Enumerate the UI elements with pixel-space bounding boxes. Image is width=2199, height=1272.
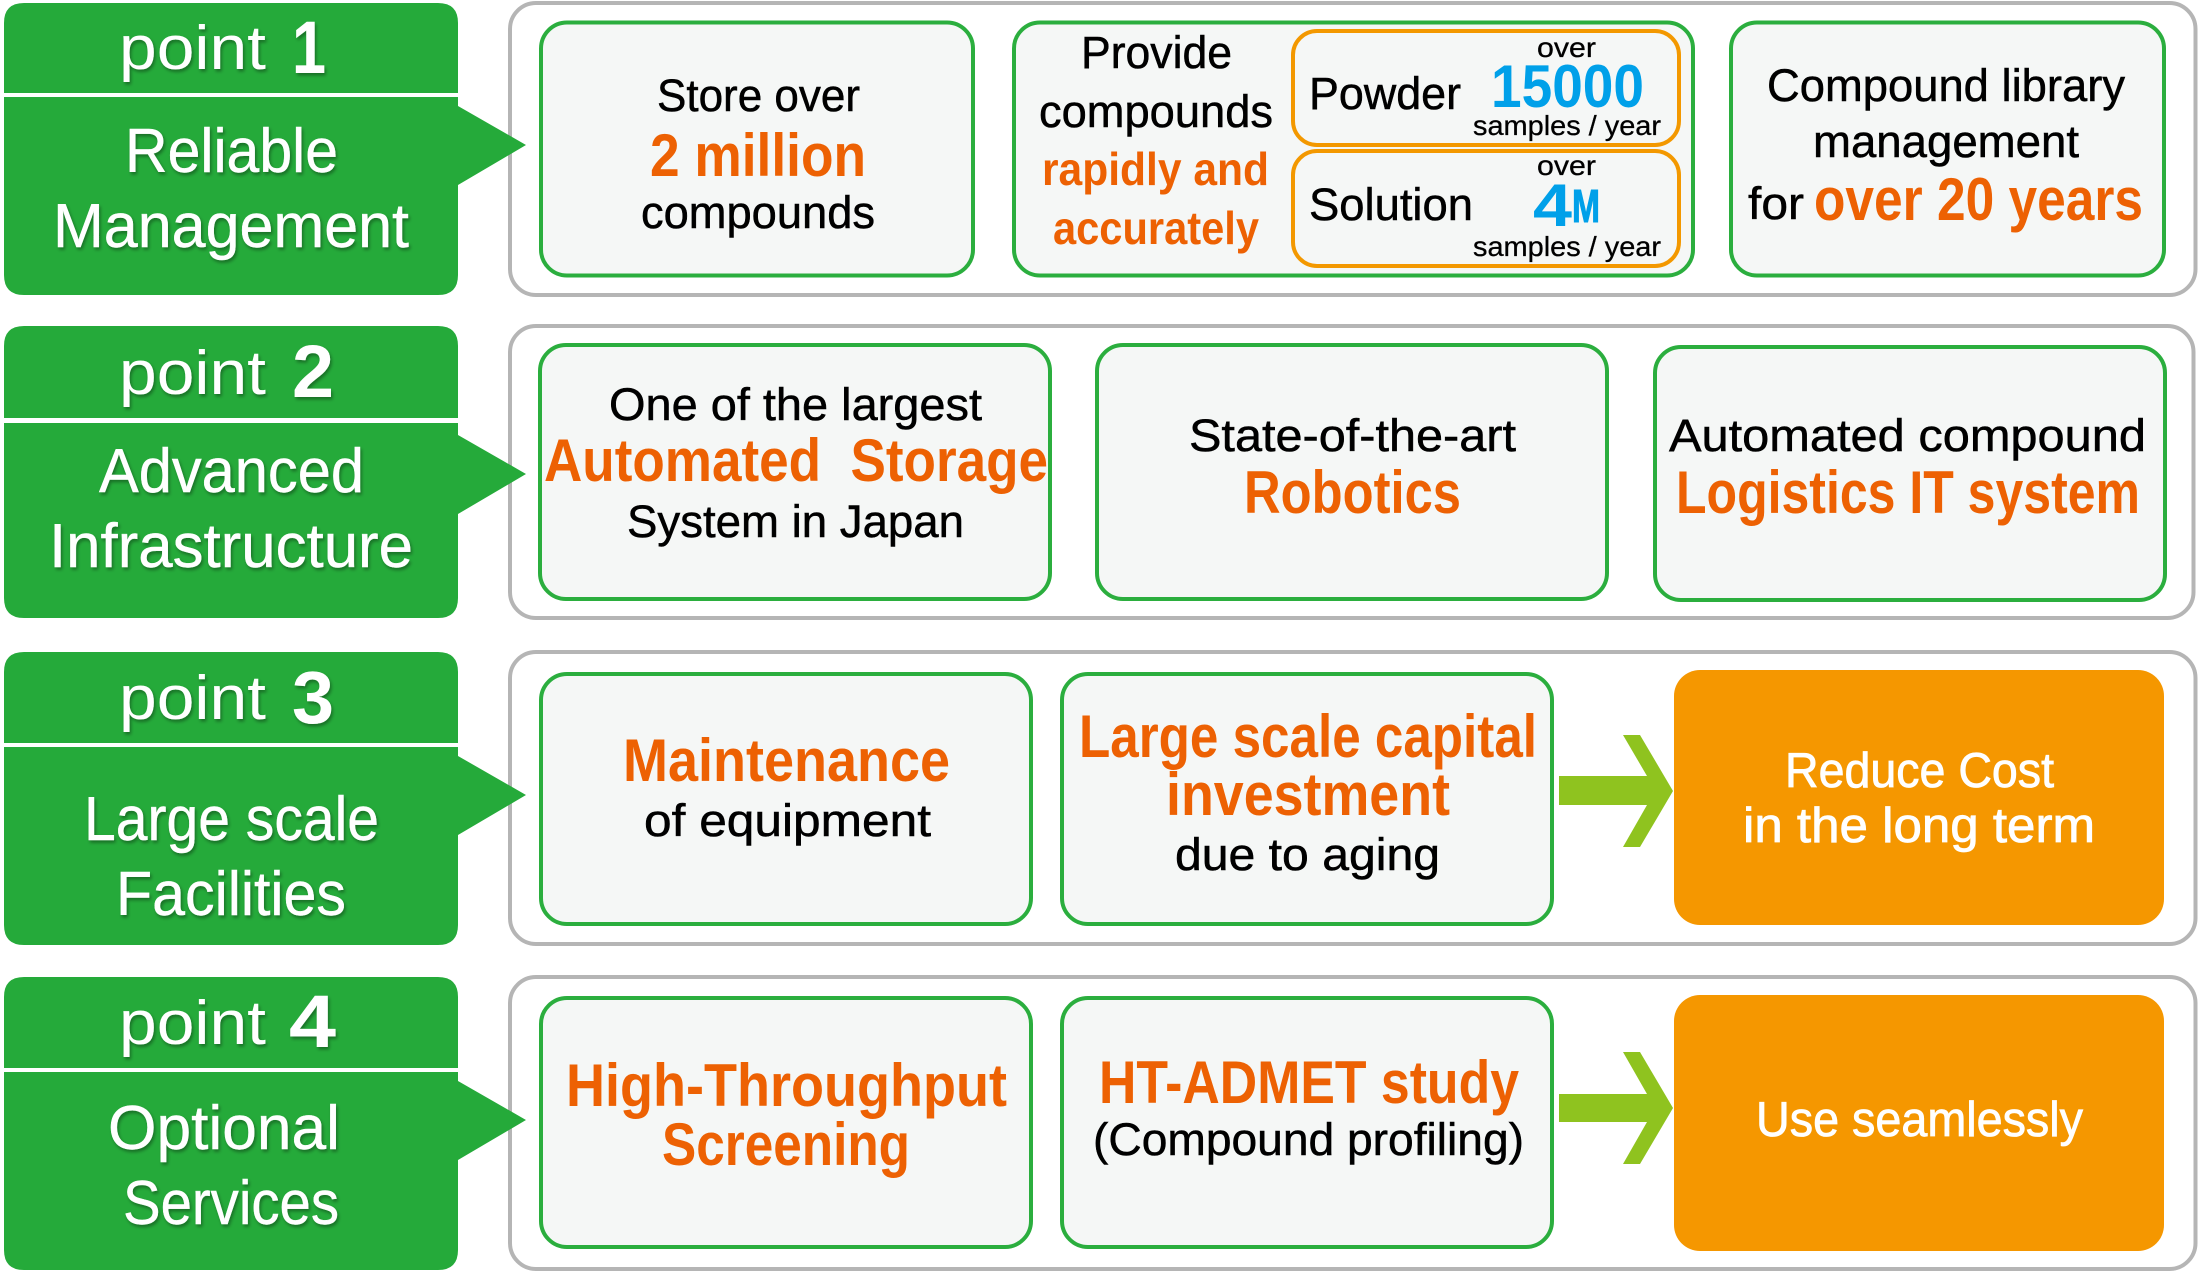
row 3: large scale facilities bbox=[4, 652, 2196, 945]
heading: point 2: point bbox=[119, 339, 266, 408]
tab header shape bbox=[4, 326, 458, 418]
result: reduce cost bbox=[1674, 670, 2164, 925]
result: use seamlessly: Use seamlessly bbox=[1756, 1093, 2083, 1147]
card: maintenance bbox=[541, 674, 1031, 924]
sub-card: powder: Powder bbox=[1309, 68, 1461, 119]
tab: point 4 bbox=[4, 977, 526, 1270]
card: library management bbox=[1731, 22, 2164, 276]
card: logistics IT system bbox=[1655, 347, 2165, 600]
card: HT-ADMET study: (Compound profiling) bbox=[1093, 1114, 1524, 1165]
heading: Reliable Management: Management bbox=[53, 192, 409, 261]
sub-card: powder: samples / year bbox=[1473, 110, 1661, 141]
card: capital investment bbox=[1062, 674, 1552, 924]
panel: point 4 content bbox=[510, 977, 2196, 1269]
heading: Advanced Infrastructure: Infrastructure bbox=[49, 512, 413, 581]
heading: Optional Services bbox=[108, 1094, 340, 1238]
heading: point 4 bbox=[119, 980, 336, 1063]
card: robotics: State-of-the-art bbox=[1189, 410, 1517, 461]
result: reduce cost: in the long term bbox=[1743, 799, 2095, 853]
arrow: to reduce cost bbox=[1559, 735, 1673, 847]
card: maintenance: of equipment bbox=[644, 795, 932, 846]
card: library management: Compound library bbox=[1767, 60, 2125, 111]
panel: point 1 content bbox=[510, 3, 2196, 295]
tab body with pointer bbox=[4, 747, 526, 945]
card: automated storage: Automated Storage bbox=[544, 427, 1048, 494]
heading: Reliable Management bbox=[53, 117, 409, 261]
heading: point 3: 3 bbox=[292, 656, 334, 739]
sub-card: powder: 15000 bbox=[1491, 53, 1644, 120]
heading: point 3: point bbox=[119, 664, 266, 733]
card: automated storage: One of the largest bbox=[609, 379, 983, 430]
card: provide compounds: compounds bbox=[1039, 86, 1273, 137]
card: library management: management bbox=[1813, 116, 2079, 167]
tab: point 2 bbox=[4, 326, 526, 618]
card: automated storage: System in Japan bbox=[627, 496, 964, 547]
sub-card: solution bbox=[1293, 150, 1679, 266]
card: library management: for bbox=[1748, 178, 1804, 229]
heading: point 1: 1 bbox=[292, 6, 326, 89]
tab: point 1 bbox=[4, 3, 526, 295]
heading: Reliable Management: Reliable bbox=[125, 117, 338, 186]
heading: Optional Services: Services bbox=[123, 1169, 339, 1238]
card: provide compounds: Provide bbox=[1081, 27, 1232, 78]
card: capital investment: due to aging bbox=[1175, 829, 1440, 880]
card: robotics: Robotics bbox=[1244, 459, 1461, 526]
sub-card: powder: over bbox=[1537, 32, 1596, 63]
sub-card: solution: over bbox=[1537, 150, 1596, 181]
card: robotics bbox=[1097, 345, 1607, 599]
sub-card: powder bbox=[1293, 31, 1679, 145]
result: reduce cost: Reduce Cost bbox=[1785, 744, 2054, 798]
tab: point 3 bbox=[4, 652, 526, 945]
card: HT-ADMET study bbox=[1062, 998, 1552, 1247]
tab header shape bbox=[4, 652, 458, 743]
tab body with pointer bbox=[4, 97, 526, 295]
panel: point 2 content bbox=[510, 326, 2194, 618]
heading: point 3 bbox=[119, 656, 334, 739]
card: logistics IT system: Automated compound bbox=[1669, 410, 2146, 461]
heading: Large scale Facilities bbox=[84, 785, 379, 929]
sub-card: solution: M bbox=[1572, 180, 1600, 232]
sub-card: solution: Solution bbox=[1309, 179, 1473, 230]
tab header shape bbox=[4, 977, 458, 1068]
card: store over 2 million bbox=[541, 22, 973, 276]
heading: Large scale Facilities: Large scale bbox=[84, 785, 379, 854]
arrow: to use seamlessly bbox=[1559, 1052, 1673, 1164]
heading: Advanced Infrastructure bbox=[49, 437, 413, 581]
card: provide compounds bbox=[1014, 22, 1693, 276]
card: maintenance: Maintenance bbox=[623, 727, 950, 794]
sub-card: solution: samples / year bbox=[1473, 231, 1661, 262]
card: HT-ADMET study: HT-ADMET study bbox=[1099, 1049, 1520, 1116]
tab body with pointer bbox=[4, 1072, 526, 1270]
card: library management: over 20 years bbox=[1814, 166, 2143, 233]
card: provide compounds: accurately bbox=[1053, 202, 1259, 254]
heading: point 4: point bbox=[119, 989, 266, 1058]
tab body with pointer bbox=[4, 423, 526, 618]
card: capital investment: Large scale capital bbox=[1079, 703, 1537, 770]
heading: Optional Services: Optional bbox=[108, 1094, 340, 1163]
heading: point 1: point bbox=[119, 14, 266, 83]
heading: point 2 bbox=[119, 330, 334, 413]
panel: point 3 content bbox=[510, 652, 2196, 944]
row 4: optional services bbox=[4, 977, 2196, 1270]
card: high-throughput screening: Screening bbox=[662, 1111, 910, 1178]
heading: Advanced Infrastructure: Advanced bbox=[99, 437, 364, 506]
heading: point 4: 4 bbox=[289, 980, 336, 1063]
card: store over 2 million: 2 million bbox=[650, 122, 866, 189]
row 1: reliable management bbox=[4, 3, 2196, 295]
card: store over 2 million: compounds bbox=[641, 187, 875, 238]
heading: point 2: 2 bbox=[292, 330, 334, 413]
card: high-throughput screening: High-Throughput bbox=[566, 1052, 1007, 1119]
card: capital investment: investment bbox=[1166, 761, 1450, 828]
card: high-throughput screening bbox=[541, 998, 1031, 1247]
card: automated storage bbox=[540, 345, 1050, 599]
card: provide compounds: rapidly and bbox=[1042, 143, 1269, 195]
card: store over 2 million: Store over bbox=[657, 70, 860, 121]
heading: Large scale Facilities: Facilities bbox=[116, 860, 346, 929]
result: use seamlessly bbox=[1674, 995, 2164, 1251]
sub-card: solution: 4 bbox=[1533, 172, 1573, 239]
row 2: advanced infrastructure bbox=[4, 326, 2194, 618]
tab header shape bbox=[4, 3, 458, 93]
heading: point 1 bbox=[119, 6, 326, 89]
